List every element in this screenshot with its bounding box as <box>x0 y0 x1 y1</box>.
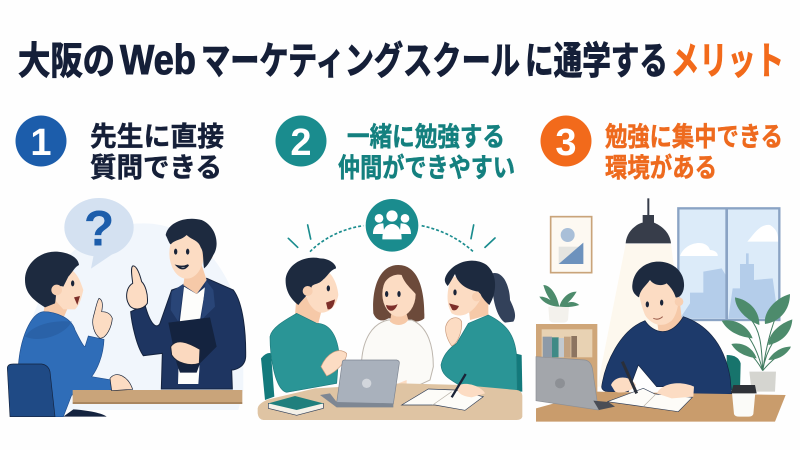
heading 3 <box>605 122 783 183</box>
desk <box>536 392 786 422</box>
heading 1 <box>90 122 224 183</box>
green book <box>268 396 323 415</box>
large plant <box>722 294 792 392</box>
table <box>73 390 242 404</box>
number badge 1 <box>16 116 66 166</box>
framed picture <box>551 217 592 273</box>
title: に通学する <box>525 41 668 83</box>
small plant <box>539 285 579 323</box>
emphasis ticks <box>288 225 495 247</box>
pale background shape <box>17 223 243 410</box>
dashed connecting arcs <box>310 226 473 252</box>
window with city view <box>678 208 779 320</box>
number badge 3 <box>540 116 592 166</box>
title: マーケティングスクール <box>201 41 520 83</box>
number badge 2: 2 <box>290 122 312 164</box>
illustration 1: student asks teacher a question <box>7 198 246 417</box>
pendant lamp <box>626 198 671 243</box>
person writing <box>602 262 741 397</box>
illustration 3: studying alone in a quiet room <box>536 198 792 422</box>
laptop <box>536 357 615 410</box>
coffee cup <box>731 385 757 417</box>
light beam <box>597 244 678 387</box>
speech bubble with question mark: ? <box>84 200 114 256</box>
title <box>18 36 784 83</box>
table <box>258 383 522 420</box>
teacher <box>127 219 246 389</box>
group icon <box>366 199 418 252</box>
number badge 2 <box>276 116 326 166</box>
student <box>7 252 112 417</box>
heading 2 <box>338 122 515 183</box>
person middle <box>362 265 433 391</box>
heading 1: 質問できる <box>90 153 222 183</box>
shelf with books <box>536 324 597 396</box>
heading 1: 先生に直接 <box>90 122 224 152</box>
notebook and pen <box>402 374 485 410</box>
title: Web <box>120 36 196 83</box>
speech bubble with question mark <box>64 198 134 269</box>
laptop <box>320 360 399 407</box>
number badge 3: 3 <box>555 122 577 164</box>
person left <box>261 258 347 400</box>
student hand on table <box>110 375 133 391</box>
open notebook <box>607 388 692 412</box>
number badge 1: 1 <box>30 122 52 164</box>
illustration 2: three students studying together <box>258 199 522 420</box>
heading 2: 一緒に勉強する <box>347 122 505 152</box>
heading 2: 仲間ができやすい <box>338 153 515 183</box>
writing hand and pen <box>611 362 694 398</box>
heading 3: 環境がある <box>605 153 717 183</box>
person right <box>441 261 522 395</box>
title: 大阪の <box>18 41 115 83</box>
